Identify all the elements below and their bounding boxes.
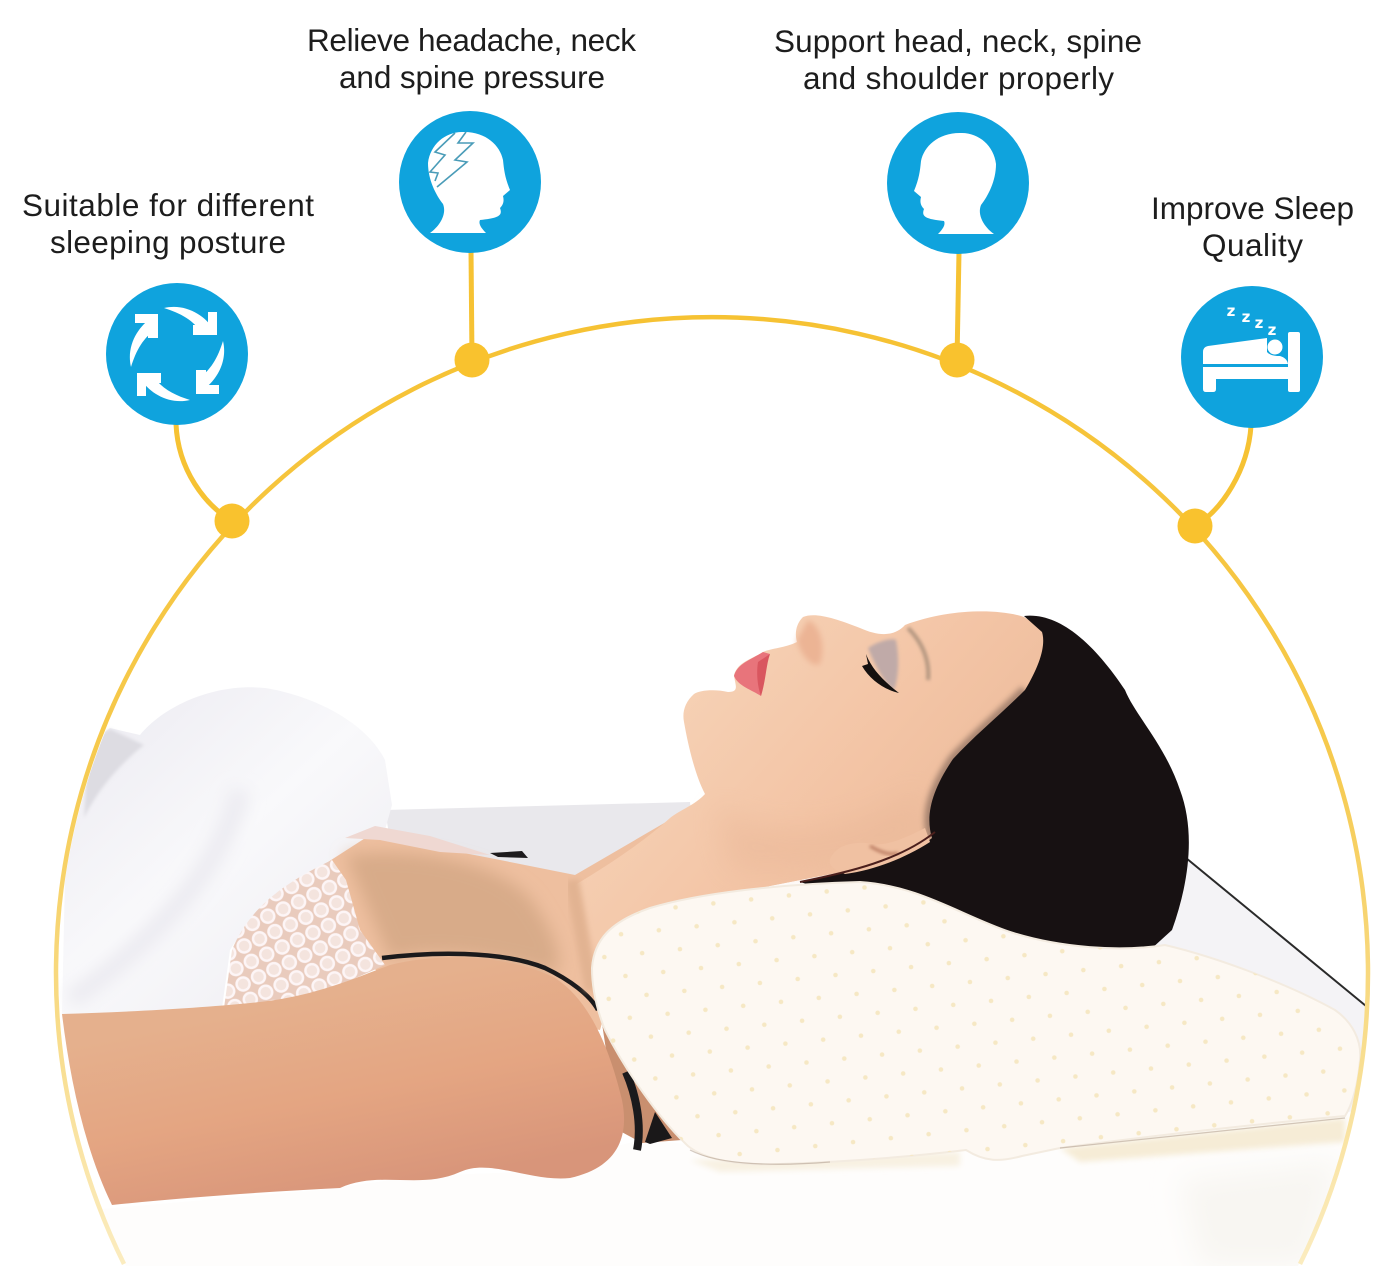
connectors (176, 250, 1251, 526)
label: support head: Support head, neck, spine (774, 23, 1142, 59)
label: improve sleep: Quality (1202, 227, 1303, 263)
eyebrow (908, 628, 928, 680)
back bed sheet (387, 802, 690, 875)
icon: sleeping in bed: z (1227, 302, 1236, 320)
connector dots (214, 342, 1212, 544)
nose shade (797, 620, 822, 665)
upper arm (62, 957, 624, 1205)
icon: rotating arrows (106, 283, 248, 425)
black strap (382, 954, 598, 1010)
dome arc (56, 317, 1368, 1264)
hair (800, 616, 1189, 960)
face and neck (579, 611, 1044, 952)
label: relieve pressure (307, 22, 636, 95)
hair soft edge (929, 690, 1025, 838)
photo: woman sleeping on contour pillow (62, 611, 1366, 1266)
bra strap upper (490, 851, 528, 858)
icon: sleeping in bed: z (1268, 321, 1277, 339)
right mattress edge (1156, 858, 1365, 1112)
label: different sleeping posture (22, 187, 314, 260)
jaw shade (782, 874, 828, 884)
icon: sleeping in bed: z (1255, 314, 1264, 332)
label: different sleeping posture: sleeping posture (50, 224, 286, 260)
icon: head silhouette (887, 112, 1029, 254)
eyelashes (862, 654, 899, 693)
icon: sleeping in bed: z (1242, 308, 1251, 326)
icon: sleeping in bed (1181, 286, 1323, 428)
lace bra (224, 860, 385, 1008)
icon: head with lightning (399, 111, 541, 253)
hair strands (800, 832, 935, 882)
front bed sheet (694, 1112, 1350, 1266)
label: different sleeping posture: Suitable for different (22, 187, 314, 223)
ear (843, 828, 930, 874)
label: support head (774, 23, 1142, 96)
upper lace trim (345, 826, 490, 855)
label: support head: and shoulder properly (803, 60, 1114, 96)
label: improve sleep: Improve Sleep (1151, 190, 1354, 226)
neck crease shade (572, 880, 592, 990)
label: relieve pressure: Relieve headache, neck (307, 22, 636, 58)
eyeshadow (868, 639, 898, 690)
label: improve sleep (1151, 190, 1354, 263)
label: relieve pressure: and spine pressure (339, 59, 605, 95)
contour pillow (592, 882, 1360, 1164)
duvet (62, 687, 392, 1015)
torso (300, 790, 900, 1143)
strap under arm (626, 1072, 639, 1150)
lips (734, 652, 770, 696)
